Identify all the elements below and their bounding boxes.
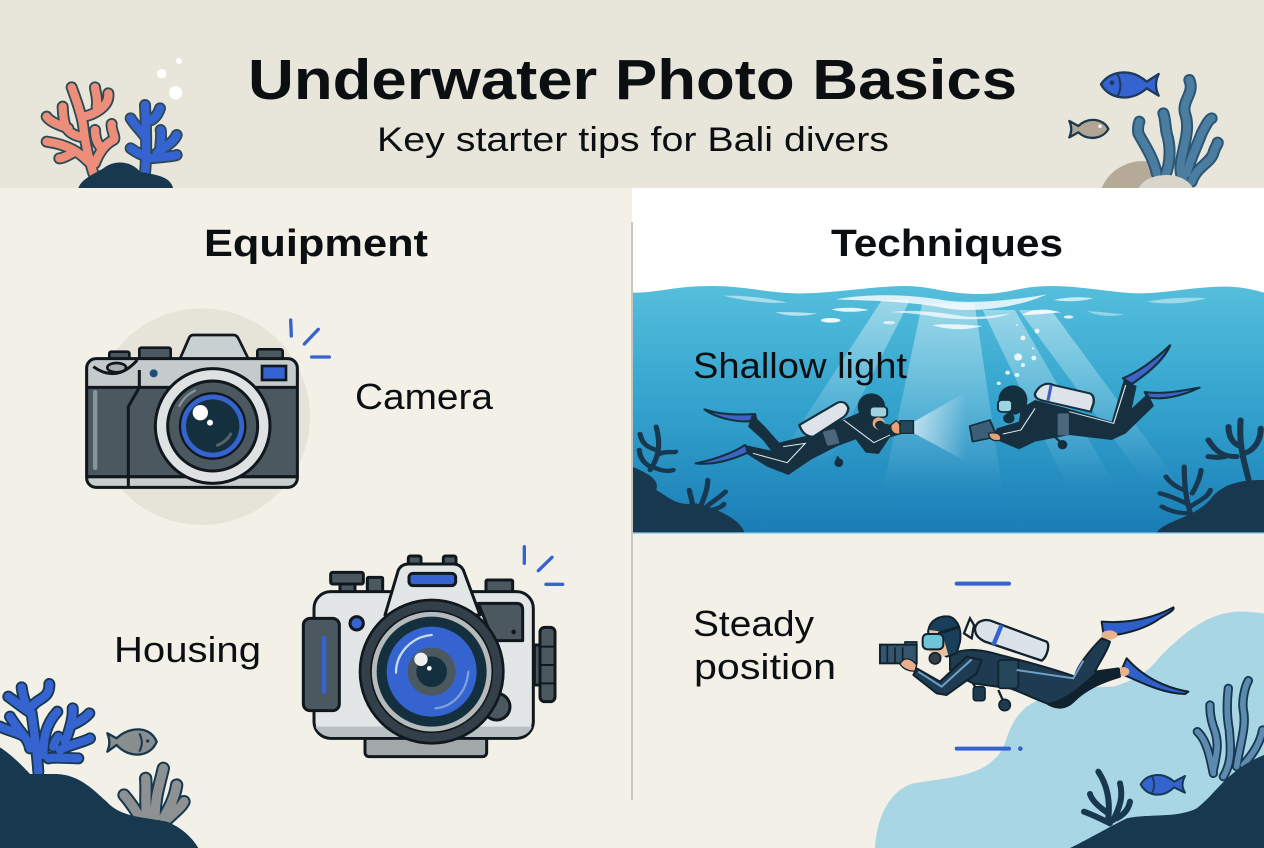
panel: techniques [632,188,1264,848]
title: Underwater Photo Basics [248,48,1017,112]
subtitle: Key starter tips for Bali divers [377,121,889,159]
panel: equipment [0,188,632,848]
steady position label: Steady [693,603,814,644]
diver with camera [880,607,1188,711]
right diver with camera [970,345,1200,449]
left diver with torch camera [696,393,913,475]
housing label: Housing [114,629,261,670]
techniques heading: Techniques [831,223,1063,265]
shallow light label: Shallow light [693,345,907,386]
bottom left reef with coral and fish [0,684,198,848]
steady position label second line: position [694,646,836,687]
header band [0,0,1264,189]
header left coral group [47,58,182,189]
steady position scene [875,584,1264,848]
camera icon [87,308,329,525]
equipment heading: Equipment [204,223,428,265]
housing icon [303,547,563,757]
header right fish and seaweed [1069,72,1218,189]
camera label: Camera [355,376,494,417]
underwater scene: shallow light [632,286,1264,534]
